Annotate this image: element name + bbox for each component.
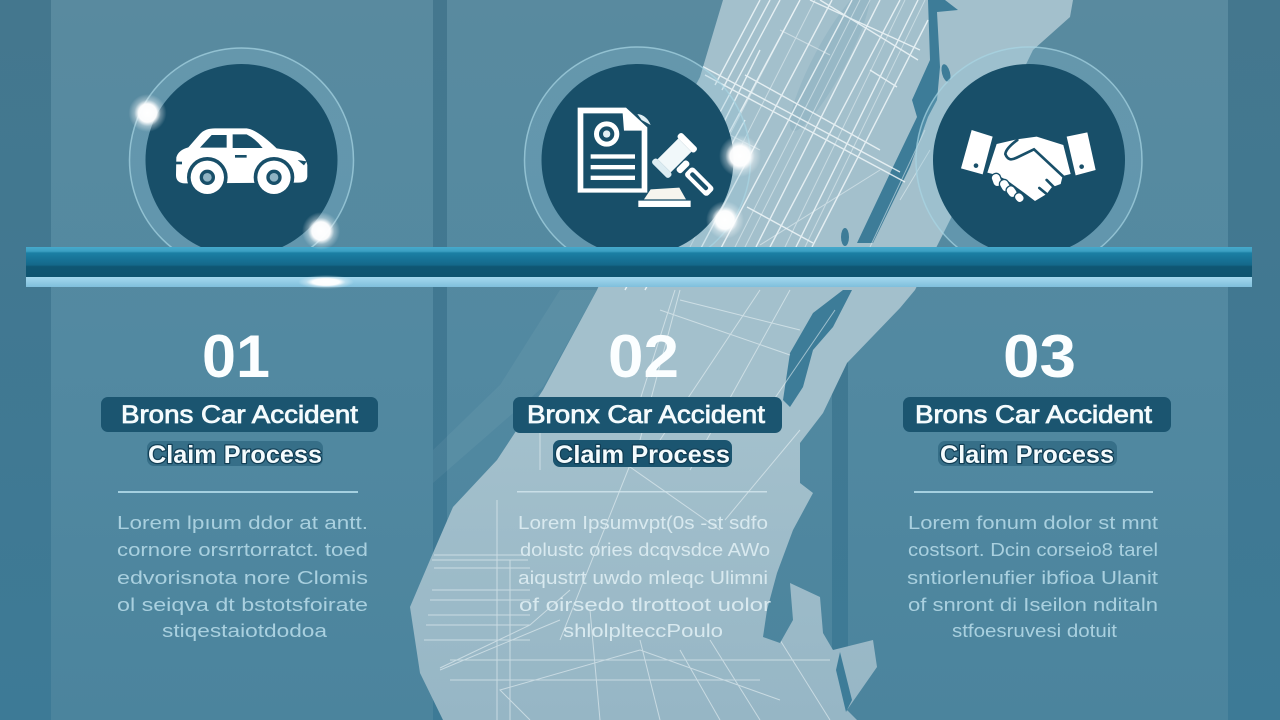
step 1 body text: stiqestaiotdodoa bbox=[162, 620, 328, 641]
step 1: car accident bbox=[101, 48, 378, 641]
step 3 title: Brons Car Accident bbox=[915, 401, 1152, 429]
step 1 title: Brons Car Accident bbox=[121, 401, 358, 429]
icon: document and gavel bbox=[578, 108, 726, 207]
step 3 icon badge bbox=[916, 47, 1142, 273]
step 2 body text: aiqustrt uwdo mleqc Ulimni bbox=[518, 567, 768, 588]
panel: step 3 background bbox=[848, 0, 1228, 720]
map: rivers bbox=[783, 0, 958, 712]
step 3: settlement bbox=[903, 47, 1171, 641]
step 3 body text: sntiorlenufier ibfioa Ulanit bbox=[907, 567, 1158, 588]
step 2 body text: of oirsedo tlrottoot uolor bbox=[519, 594, 771, 615]
step 3 body text bbox=[907, 512, 1158, 641]
step 2 body text bbox=[518, 512, 771, 641]
map of the Bronx bbox=[410, 0, 1073, 720]
step 1 body text: edvorisnota nore Clomis bbox=[117, 567, 368, 588]
step 3 number: 03 bbox=[1003, 323, 1076, 390]
map: faint land halo bbox=[433, 290, 597, 483]
step 2 body text: shlolplteccPoulo bbox=[563, 620, 723, 641]
icon: car bbox=[175, 128, 307, 198]
step 2 icon badge bbox=[524, 47, 750, 273]
step 3 body text: stfoesruvesi dotuit bbox=[952, 620, 1117, 641]
step 3 title bbox=[903, 397, 1171, 469]
step 1 number: 01 bbox=[202, 323, 270, 390]
glow highlights bbox=[128, 94, 761, 289]
step 3 body text: of snront di Iseilon nditaln bbox=[908, 594, 1158, 615]
panel: step 2 background bbox=[447, 0, 832, 720]
step 1 body text: cornore orsrrtorratct. toed bbox=[117, 539, 368, 560]
step 3 title: Claim Process bbox=[940, 441, 1114, 469]
step 1 body text: Lorem lpıum ddor at antt. bbox=[117, 512, 368, 533]
step 2 body text: Lorem Ipsumvpt(0s -st sdfo bbox=[518, 512, 768, 533]
step 2 title: Claim Process bbox=[555, 441, 730, 469]
step 2: legal claim bbox=[513, 47, 782, 641]
step 1 body text: ol seiqva dt bstotsfoirate bbox=[117, 594, 368, 615]
step 1 body text bbox=[117, 512, 368, 641]
step 2 title: Bronx Car Accident bbox=[527, 401, 765, 429]
step 2 body text: dolustc ories dcqvsdce AWo bbox=[520, 539, 770, 560]
step 3 body text: Lorem fonum dolor st mnt bbox=[908, 512, 1158, 533]
step 1 title bbox=[101, 397, 378, 469]
panel: step 1 background bbox=[51, 0, 433, 720]
step 3 body text: costsort. Dcin corseio8 tarel bbox=[908, 539, 1158, 560]
map: road network bbox=[424, 0, 930, 720]
icon: handshake bbox=[961, 130, 1096, 204]
step 2 number: 02 bbox=[608, 323, 679, 390]
step 2 title bbox=[513, 397, 782, 469]
step 1 title: Claim Process bbox=[148, 441, 322, 469]
timeline bar bbox=[26, 247, 1252, 287]
step 1 icon badge bbox=[130, 48, 354, 272]
map: shaded band bbox=[778, 0, 882, 138]
